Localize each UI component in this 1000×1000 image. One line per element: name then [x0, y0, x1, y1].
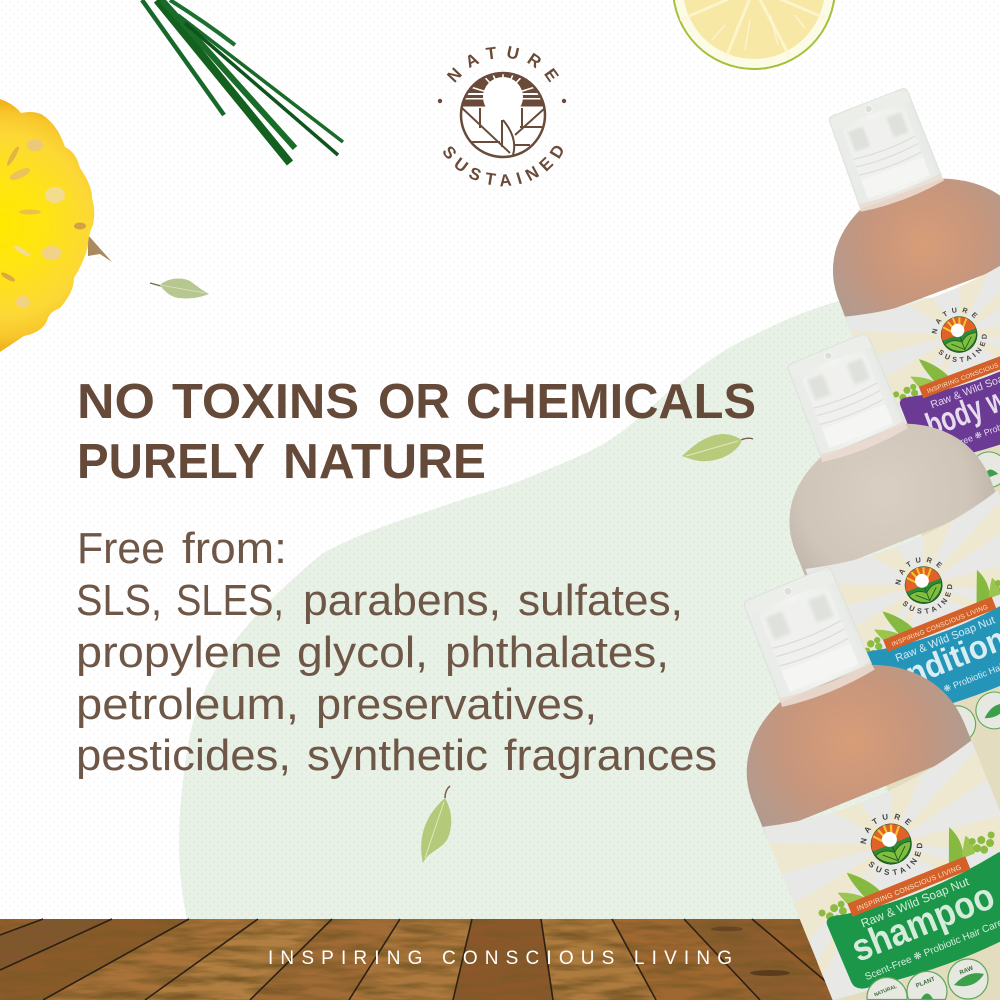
body text: fragrances	[504, 731, 717, 780]
leaf: right	[682, 434, 753, 461]
body text: glycol,	[297, 628, 428, 677]
bottle: shampoo (front)	[744, 567, 1000, 1000]
headline: TOXINS	[172, 375, 359, 429]
bottle: conditioner (middle)	[788, 334, 1000, 810]
shampoo green panel	[827, 852, 1000, 989]
logo emblem	[460, 72, 546, 158]
shampoo badges	[867, 959, 988, 1000]
bottle: body wash (back): NATURE	[932, 307, 978, 334]
logo ring text: NATURE	[446, 46, 559, 83]
bottle: body wash (back): SUSTAINED	[938, 334, 987, 362]
bottle: body wash (back)	[828, 88, 1000, 536]
bottle: conditioner (middle): SUSTAINED	[902, 584, 952, 614]
body text: synthetic	[307, 731, 488, 780]
body text: preservatives,	[316, 680, 597, 729]
logo dots	[438, 99, 566, 103]
shampoo foliage	[807, 812, 1000, 933]
green blob	[179, 298, 1000, 919]
tagline: INSPIRING CONSCIOUS LIVING	[268, 948, 732, 969]
shampoo badges: RAW	[959, 966, 975, 976]
bottle: conditioner (middle): INSPIRING CONSCIOUS LIVING	[891, 604, 989, 648]
body text: pesticides,	[76, 731, 291, 780]
bottle: conditioner (middle): NATURE	[895, 557, 942, 585]
body text: from:	[182, 524, 287, 573]
leaf: lower centre	[421, 786, 451, 863]
shampoo badges: PLANT	[915, 976, 936, 990]
shampoo dome and cap	[681, 541, 975, 834]
body text: SLS,	[76, 576, 162, 625]
wood floor	[0, 919, 1000, 1000]
body text	[76, 524, 717, 780]
body text: Free	[77, 524, 165, 573]
body text: SLES,	[176, 576, 284, 625]
body text: petroleum,	[76, 680, 299, 729]
headline: CHEMICALS	[466, 375, 756, 429]
shampoo label lower band	[833, 938, 1000, 1000]
body text: sulfates,	[518, 576, 683, 625]
headline: OR	[378, 375, 450, 429]
shampoo label text and logo: NATURE	[860, 814, 912, 844]
headline: NATURE	[283, 435, 486, 489]
shampoo label text and logo: INSPIRING CONSCIOUS LIVING	[856, 864, 962, 913]
shampoo label text and logo: SUSTAINED	[868, 843, 922, 875]
headline: PURELY	[77, 435, 265, 489]
shampoo label text and logo	[846, 814, 1000, 983]
body text: parabens,	[303, 576, 501, 625]
body text: phthalates,	[445, 628, 669, 677]
brand logo	[438, 46, 566, 186]
bottle: conditioner (middle): Raw & Wild Soap Nut	[894, 614, 997, 665]
pineapple slice	[0, 99, 112, 352]
shampoo label base	[763, 740, 1000, 1000]
headline: NO	[77, 375, 155, 429]
chives	[142, 0, 343, 163]
headline	[77, 375, 756, 489]
leaf: top left	[150, 278, 209, 298]
shampoo label text and logo: Raw & Wild Soap Nut	[859, 874, 972, 931]
body text: propylene	[76, 628, 282, 677]
shampoo badges: NATURAL	[873, 984, 898, 998]
lemon slice	[672, 0, 836, 70]
shampoo label rays	[770, 751, 1000, 976]
logo lower ring text: SUSTAINED	[443, 146, 563, 186]
